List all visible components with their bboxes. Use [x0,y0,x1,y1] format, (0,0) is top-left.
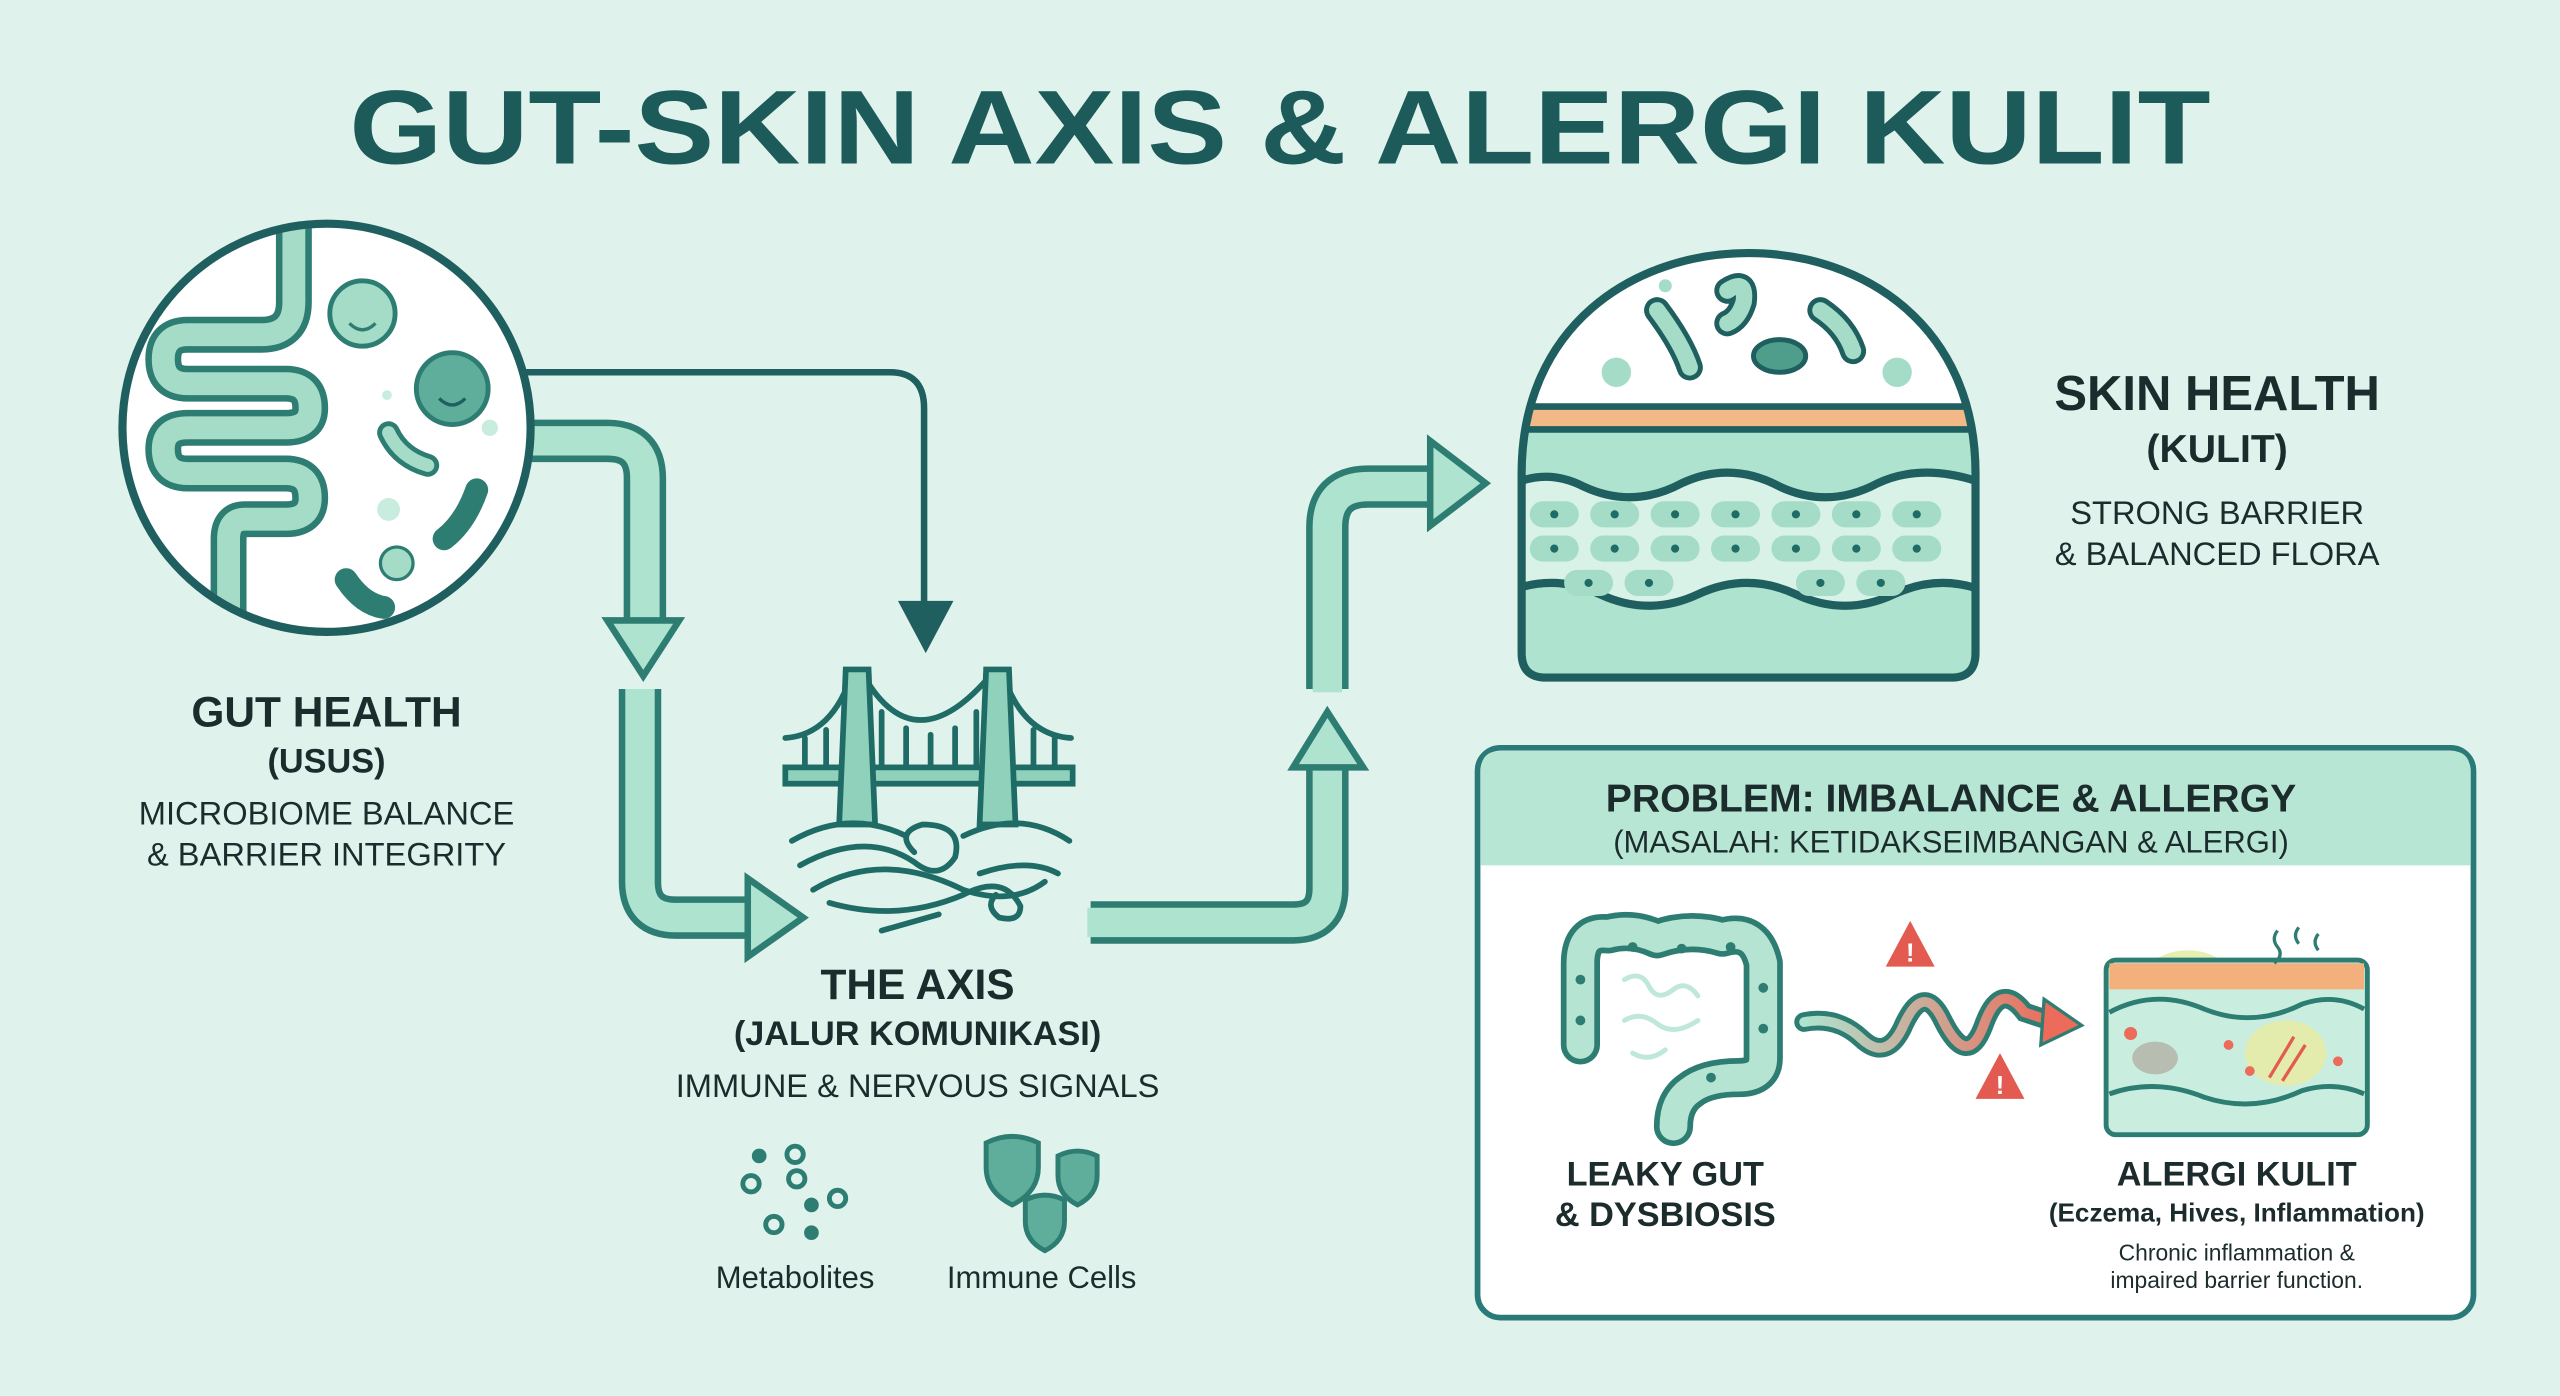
text: alergi kulit label: impaired barrier function. [2110,1267,2363,1293]
text: icon labels [716,1260,1136,1295]
text: the axis: THE AXIS [820,961,1015,1008]
icon: bridge [785,669,1073,931]
arrow: broad axis to skin [1087,441,1486,922]
arrow: dark gut to axis [526,372,953,653]
heading: problem: (MASALAH: KETIDAKSEIMBANGAN & ALERGI) [1613,824,2289,859]
text: icon labels: Immune Cells [947,1260,1136,1295]
heading: problem: PROBLEM: IMBALANCE & ALLERGY [1606,777,2296,820]
text: leaky gut label: & DYSBIOSIS [1555,1196,1776,1234]
text: the axis: (JALUR KOMUNIKASI) [734,1015,1101,1053]
text: leaky gut label: LEAKY GUT [1567,1155,1764,1193]
text: leaky gut label [1555,1155,1776,1234]
icon: inflamed skin [2106,927,2367,1135]
text: alergi kulit label [2049,1155,2425,1293]
text: gut health: & BARRIER INTEGRITY [147,835,506,872]
text: alergi kulit label: (Eczema, Hives, Inflammation) [2049,1197,2425,1227]
text: icon labels: Metabolites [716,1260,874,1295]
text: skin health: STRONG BARRIER [2070,494,2364,531]
text: the axis: IMMUNE & NERVOUS SIGNALS [676,1067,1159,1104]
title: GUT-SKIN AXIS & ALERGI KULIT [349,69,2211,186]
icon: gut circle [122,212,531,653]
icon: skin dome [1502,245,1992,689]
icon: leaky colon [1576,932,1768,1127]
text: alergi kulit label: ALERGI KULIT [2117,1155,2357,1193]
arrow: wavy problem arrow [1804,999,2082,1048]
icon: metabolites [743,1146,846,1238]
text: skin health: SKIN HEALTH [2054,367,2380,421]
panel: problem [1478,748,2473,1318]
text: gut health: (USUS) [268,742,386,780]
text: gut health: MICROBIOME BALANCE [139,795,514,832]
icon: warning triangles: ! [1996,1070,2004,1100]
text: gut health [139,689,514,872]
text: skin health: & BALANCED FLORA [2055,535,2380,572]
icon: warning triangles [1886,921,2024,1100]
icon: immune cells shields [986,1136,1097,1251]
text: skin health: (KULIT) [2146,428,2288,471]
arrow: broad gut to axis [526,441,803,957]
text: skin health [2054,367,2380,572]
heading: problem [1606,777,2296,859]
text: gut health: GUT HEALTH [191,689,462,736]
text: alergi kulit label: Chronic inflammation & [2119,1239,2355,1265]
icon: warning triangles: ! [1906,938,1915,968]
text: the axis [676,961,1159,1104]
